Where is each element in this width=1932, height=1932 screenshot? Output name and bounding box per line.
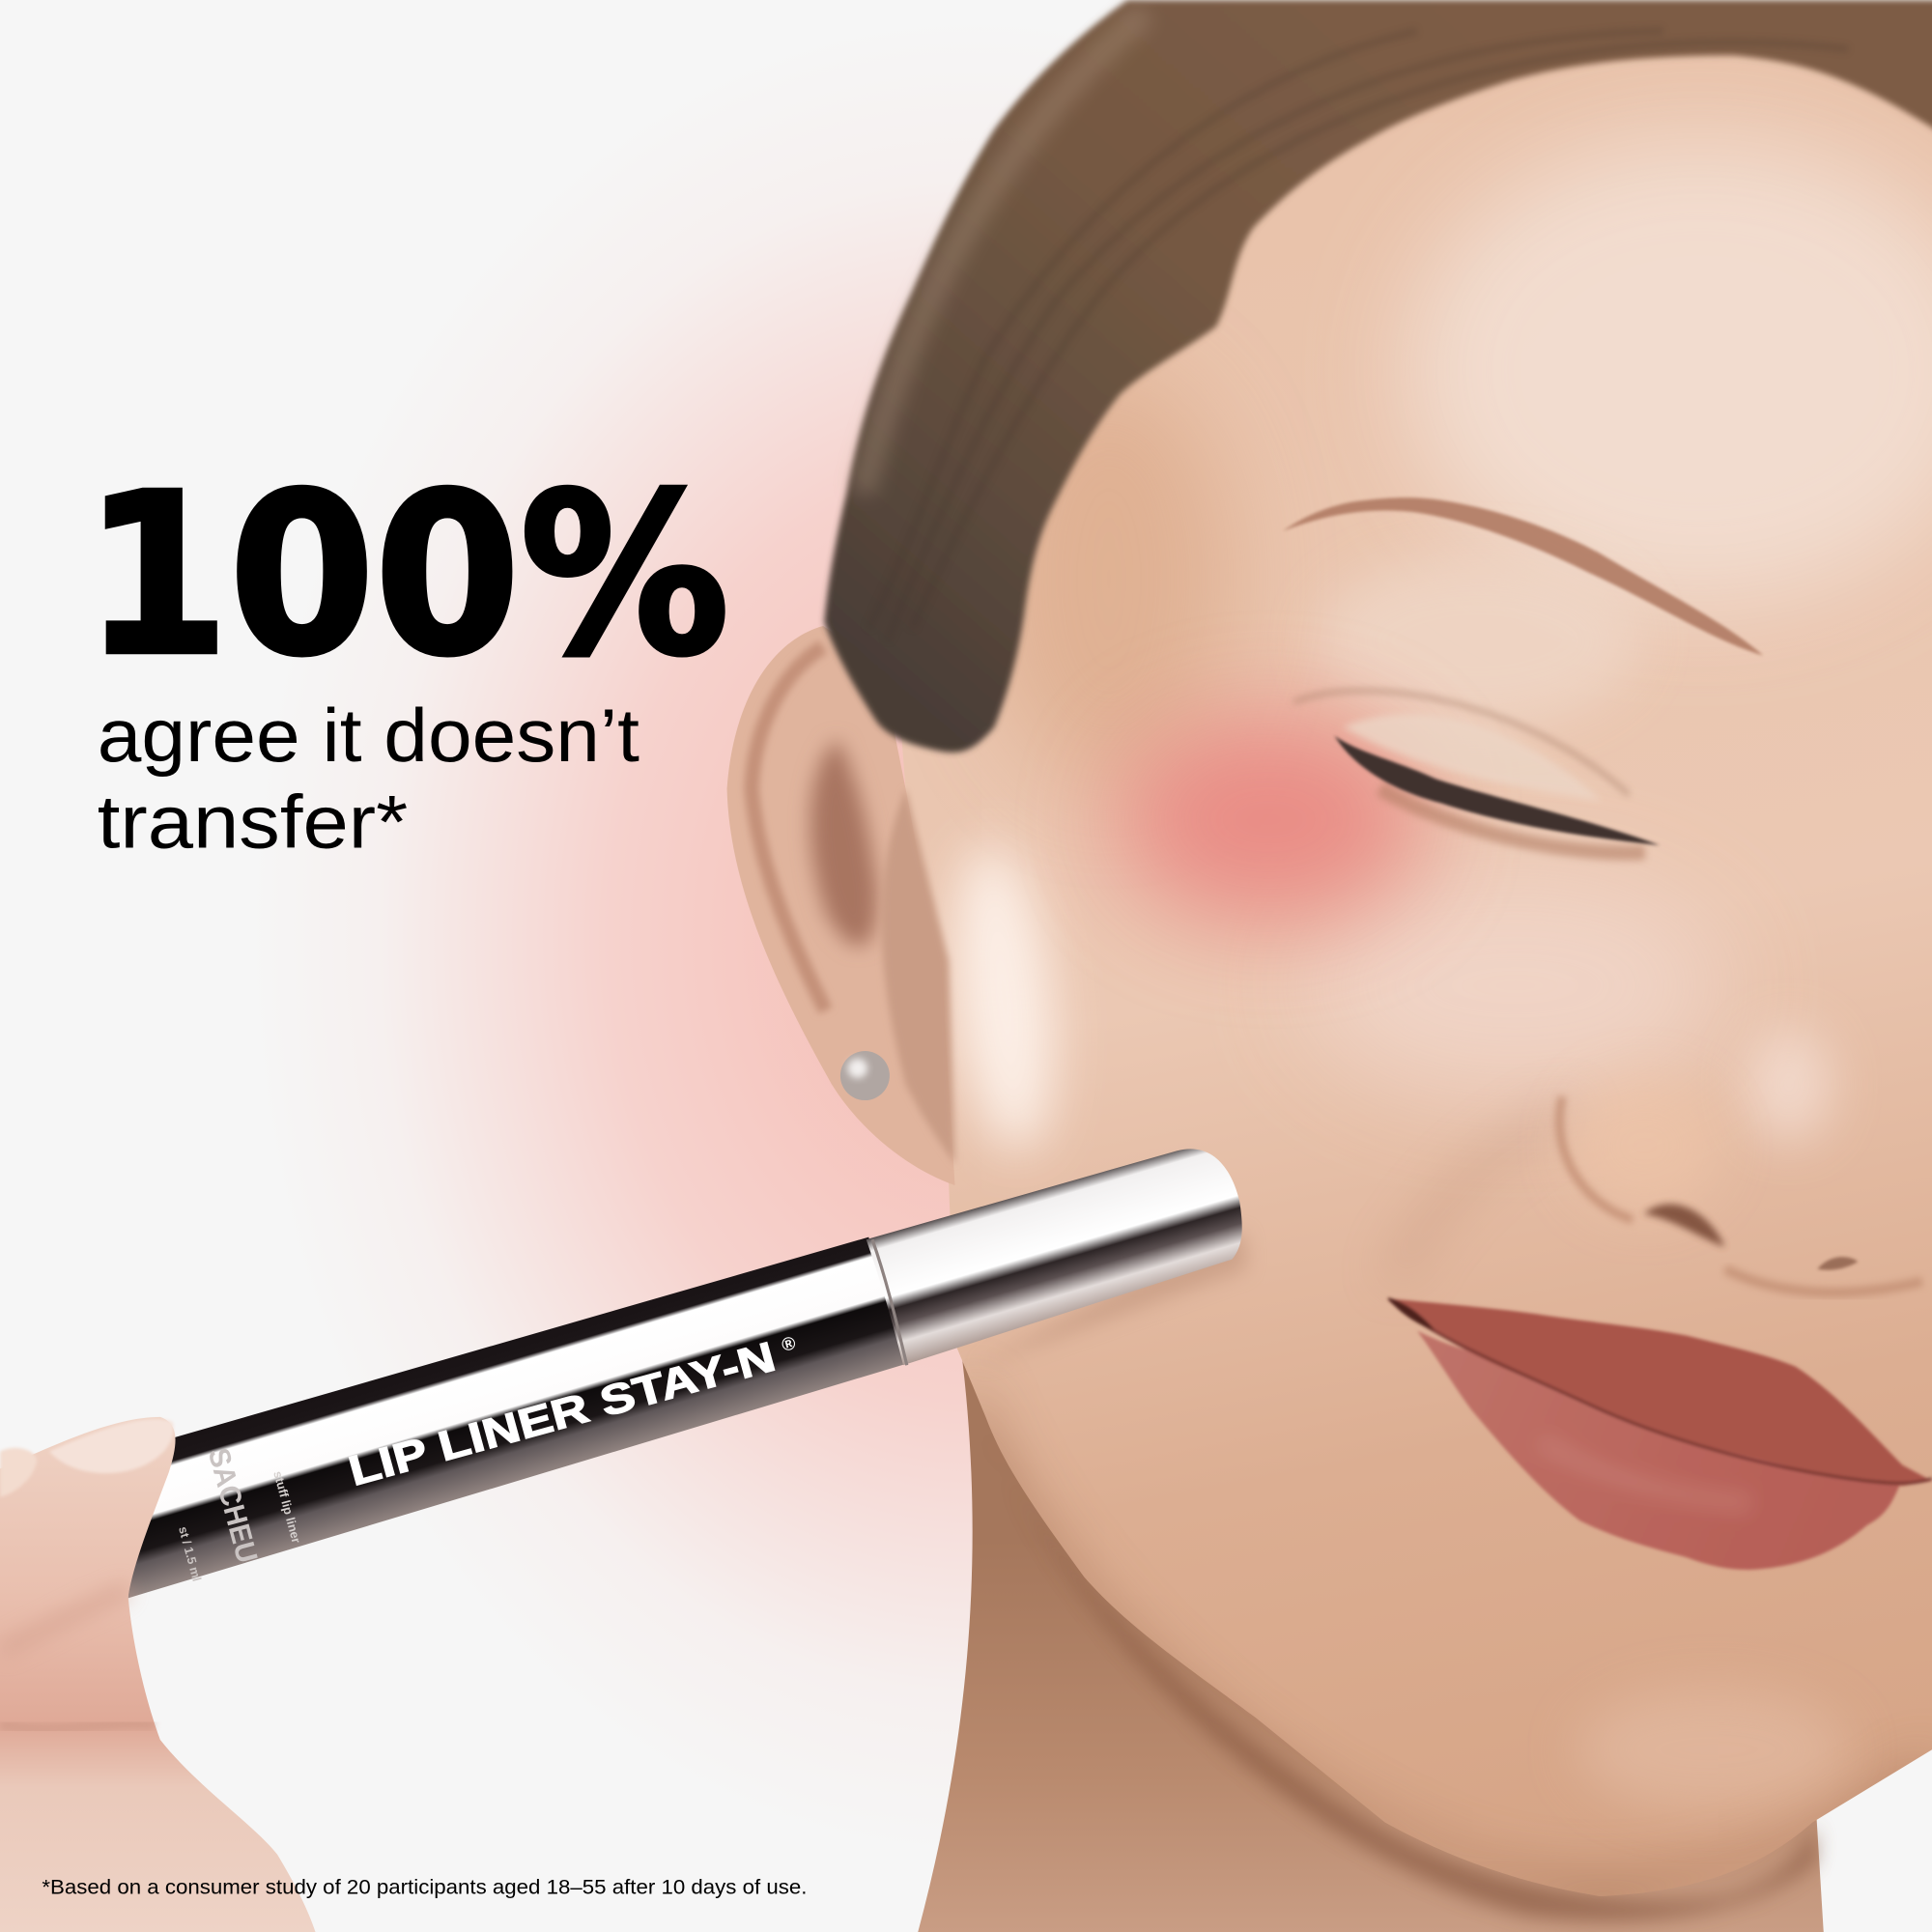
temple warm shade <box>985 370 1233 788</box>
eyelid light <box>1319 554 1638 727</box>
hand and fingers <box>0 1417 316 1932</box>
eyebrow <box>1283 497 1763 656</box>
neck <box>918 1331 1824 1932</box>
subheading <box>98 695 639 865</box>
face <box>887 37 1932 1896</box>
pen label: registered mark: ® <box>780 1333 798 1356</box>
product: lip liner pen <box>128 1149 1247 1598</box>
pen contact shadow on cheek <box>974 1233 1247 1368</box>
pen label: small print right: stuff lip liner <box>270 1469 304 1545</box>
mouth corner <box>1387 1297 1435 1331</box>
mouth line <box>1389 1298 1932 1483</box>
nostril right <box>1817 1257 1858 1270</box>
lower lip shine <box>1540 1441 1749 1503</box>
nose <box>1559 1028 1922 1293</box>
hair light along the crown edge <box>863 13 1146 493</box>
blush <box>1115 715 1423 924</box>
subheading: agree it doesn’t <box>98 695 639 778</box>
pink glow behind the model <box>246 13 1700 1861</box>
nose tip highlight <box>1747 1028 1831 1141</box>
eyelid <box>1343 714 1602 801</box>
model portrait <box>727 0 1932 1932</box>
lips <box>1387 1297 1932 1570</box>
under-lash crease <box>1380 788 1645 853</box>
earring <box>840 1051 890 1100</box>
headline stat: 100% <box>84 447 729 705</box>
lash line <box>1334 735 1660 845</box>
chin light <box>1577 1688 1848 1811</box>
cheek highlight <box>942 840 1066 1156</box>
nostril left <box>1644 1205 1725 1247</box>
second nail <box>0 1448 37 1497</box>
pen label: product name: LIP LINER STAY-N <box>344 1334 781 1495</box>
ala <box>1569 1078 1721 1213</box>
nose side to smile line shade <box>1470 1114 1548 1176</box>
ala contour <box>1559 1096 1633 1220</box>
nail <box>49 1419 173 1473</box>
fingertip shadow under pen <box>0 1589 128 1651</box>
under-eye light <box>1306 875 1725 1096</box>
hand holding the pen <box>0 1417 316 1932</box>
face shading, clipped to face outline <box>942 135 1932 1922</box>
hair <box>824 0 1932 753</box>
subheading: transfer* <box>98 781 408 865</box>
pen cap <box>867 1149 1242 1365</box>
upper lip <box>1389 1298 1932 1486</box>
footnote: *Based on a consumer study of 20 participants aged 18–55 after 10 days of use. <box>42 1876 807 1898</box>
cap ring <box>872 1239 907 1365</box>
forehead light <box>1405 135 1932 604</box>
finger crease <box>0 1723 154 1729</box>
eye socket crease <box>1293 691 1629 795</box>
pen label: brand: SACHEU <box>202 1445 264 1566</box>
pen label: small print left: st / 1.5 ml <box>176 1525 205 1583</box>
jaw shadow <box>976 1393 1920 1896</box>
neck shadow under chin <box>985 1430 1816 1921</box>
pen body <box>128 1237 905 1598</box>
tip underside <box>1725 1269 1922 1293</box>
lower lip <box>1417 1331 1902 1570</box>
ear <box>727 626 955 1185</box>
hair strands <box>868 31 1848 640</box>
